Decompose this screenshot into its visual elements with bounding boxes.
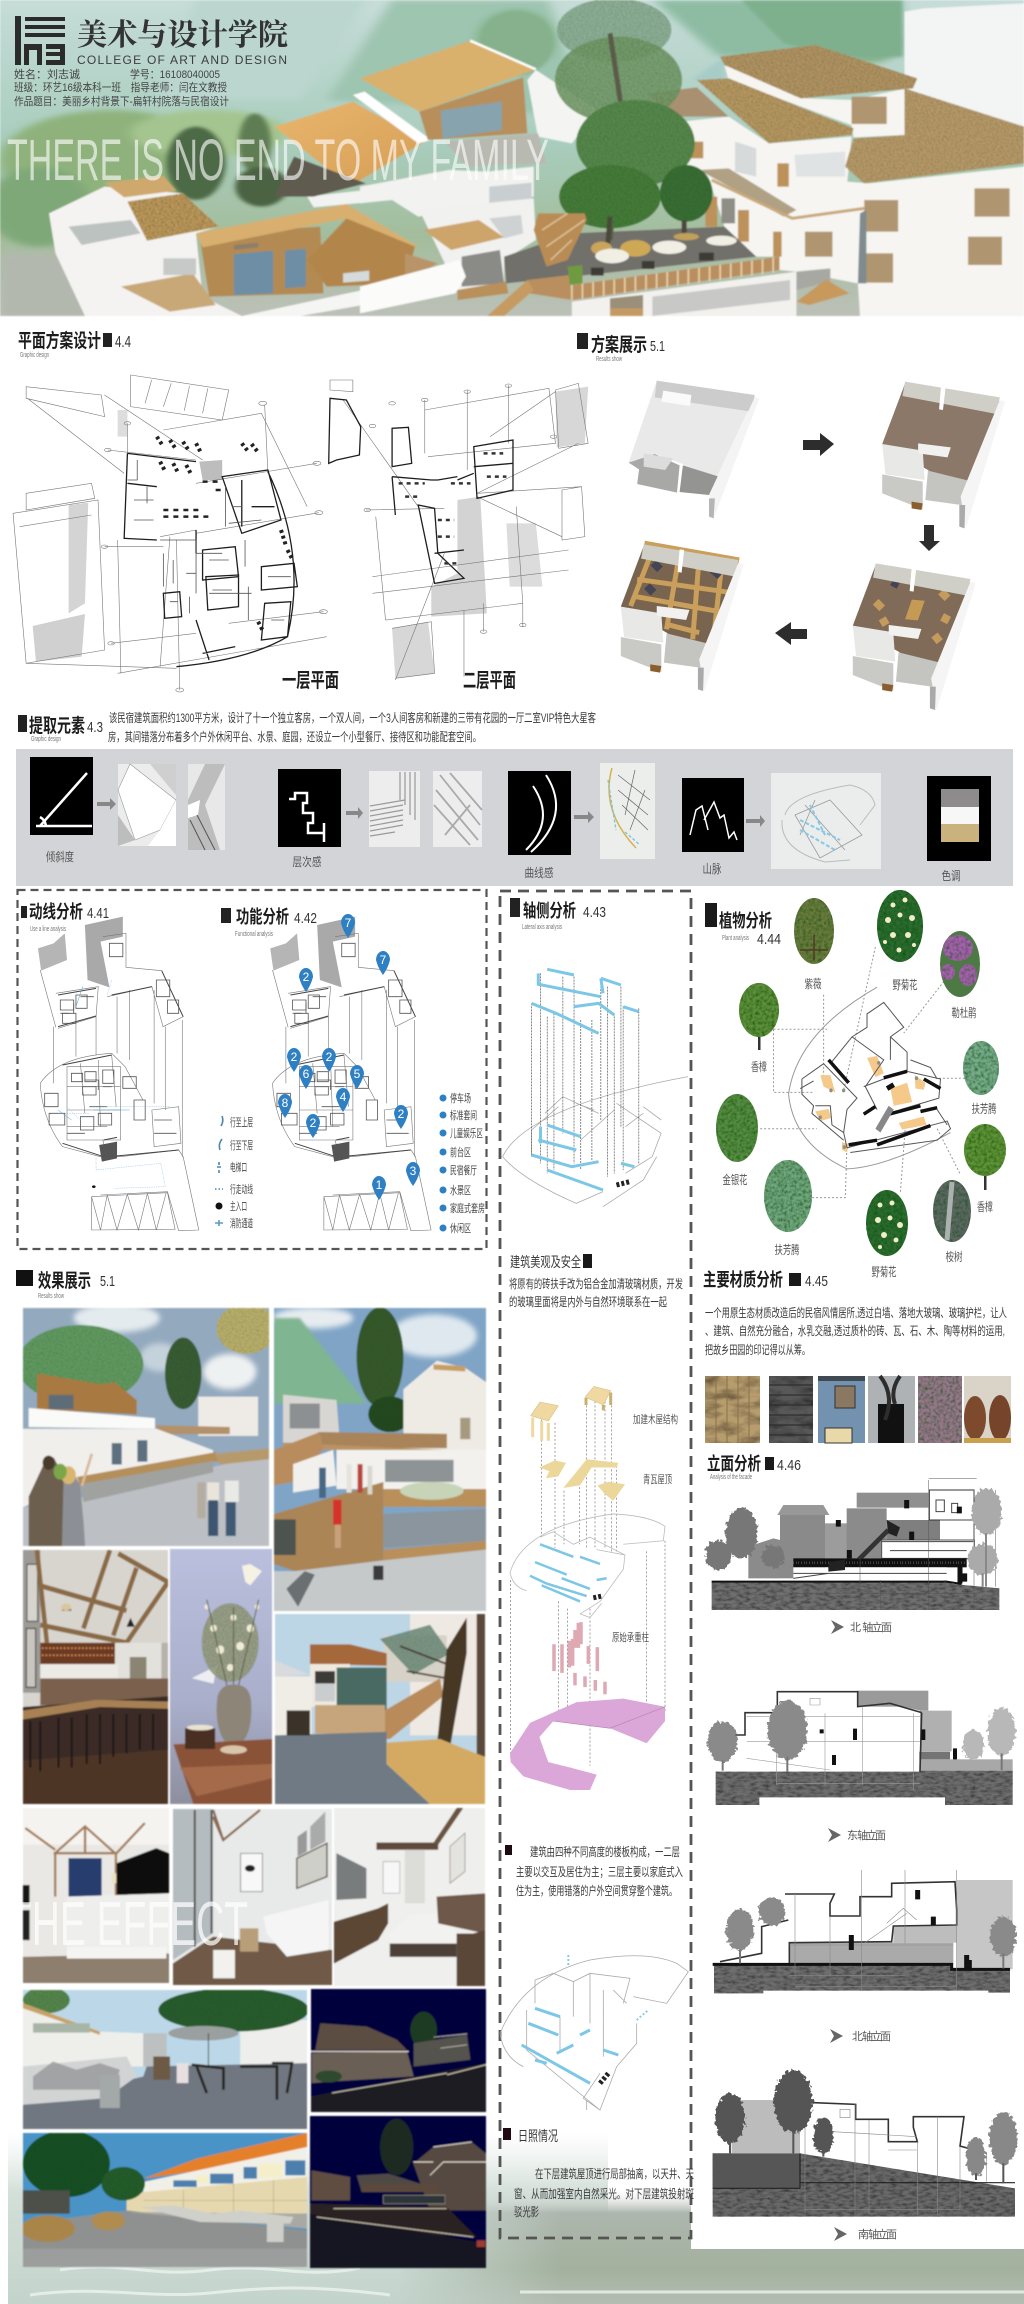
elevation label: north second [830, 2029, 891, 2043]
colour tone label: 色调 [942, 869, 960, 883]
circulation legend: 行走动线 [230, 1182, 253, 1196]
circulation legend: 消防通道 [230, 1216, 253, 1230]
stone strip and trim [699, 168, 796, 217]
text: sunlight: 在下层建筑屋顶进行局部抽离，以天井、天 [535, 2166, 694, 2181]
second floor plan [329, 380, 588, 680]
header right: hotel terraces [359, 0, 1024, 317]
floor levels text: 住为主，使用错落的户外空间贯穿整个建筑。 [516, 1883, 677, 1898]
tree [555, 0, 713, 243]
photo: bedroom with gable [23, 1808, 169, 1983]
floor labels [282, 670, 516, 692]
function legend: 家庭式套房 [450, 1201, 485, 1215]
function legend: 休闲区 [450, 1221, 471, 1235]
swatch: brick [918, 1376, 962, 1443]
curve arrow [574, 811, 594, 823]
photo: patio with umbrella [23, 1987, 309, 2129]
plant photo: wintercreeper right [963, 1041, 999, 1095]
function legend: 标准套间 [450, 1108, 477, 1122]
photo: night view one [311, 1989, 486, 2112]
function pins: 2 [398, 1107, 405, 1121]
wood cabin [199, 227, 323, 297]
swatch: blue wall [818, 1376, 865, 1443]
function legend: 前台区 [450, 1145, 471, 1159]
heading: effect display: 效果展示 [38, 1270, 91, 1292]
plant label: 扶芳腾 [972, 1101, 996, 1116]
heading: axonometric: 4.43 [583, 904, 606, 921]
wood roofs [845, 88, 1024, 183]
tree: camphor left [739, 983, 779, 1050]
timber stair [534, 213, 587, 267]
elevation label: north: 北 轴立面 [850, 1620, 892, 1634]
text: architecture and safety: 将原有的砖扶手改为铝合金加清玻璃材质，开发 [509, 1276, 683, 1291]
intro text: 该民宿建筑面积约1300平方米，设计了十一个独立客房，一个双人间，一个3人间客房和新建的三带有花园的一厅二室VIP特色大星客 [109, 710, 596, 725]
axonometric diagram 1 [502, 968, 688, 1207]
function pins: 2 [310, 1116, 317, 1130]
slope element [30, 757, 225, 850]
text: architecture and safety: 的玻璃里面将是内外与自然环境联系在一起 [509, 1294, 667, 1309]
tree: camphor right [964, 1124, 1006, 1190]
logo mark [15, 16, 65, 65]
elevation label: north second: 北 轴立面 [852, 2029, 891, 2043]
background trees [167, 113, 288, 207]
student info: 姓名：刘志诚 [14, 67, 80, 81]
mountain label: 山脉 [702, 861, 722, 876]
plant photo: bougainvillea [940, 931, 980, 997]
plant label: 紫薇 [804, 977, 822, 991]
heading: scheme display: Results show [596, 356, 623, 363]
heading: circulation: 4.41 [87, 905, 109, 922]
student info: 班级：环艺16级本科一班 指导老师：闫在文教授 [14, 80, 227, 94]
exploded axonometric diagram [510, 1386, 666, 1790]
white balcony bands [360, 167, 534, 213]
heading: circulation: 动线分析 [29, 902, 83, 922]
elevation label: east: 东 轴立面 [847, 1828, 886, 1842]
header hero image [0, 0, 1024, 317]
diagram labels: 原始承重柱 [612, 1630, 649, 1644]
text: materials [705, 1305, 1007, 1357]
slope arrow [97, 798, 116, 810]
heading: function: 4.42 [294, 910, 317, 927]
lower storey [572, 272, 796, 316]
panel: extract elements band [16, 749, 1013, 886]
text: sunlight: 驳光影 [514, 2205, 539, 2219]
heading: function: 功能分析 [236, 907, 289, 927]
heading: function: Functional analysis [235, 931, 273, 938]
circulation legend: 主入口 [230, 1200, 247, 1213]
heading: materials: 4.45 [805, 1273, 828, 1290]
heading: plant analysis: Plant analysis [722, 935, 749, 942]
curve label: 曲线感 [524, 865, 554, 880]
plant label: 勒杜鹃 [952, 1005, 976, 1020]
intro text [108, 710, 596, 744]
floor levels text: 建筑由四种不同高度的楼板构成，一二层 [530, 1844, 680, 1859]
slogan: the effect: THE EFFECT [8, 1890, 248, 1959]
panel: circulation and function analysis [18, 890, 486, 1249]
plant label: 扶芳腾 [774, 1242, 800, 1257]
function plan [270, 916, 432, 1231]
layering arrow [346, 807, 363, 819]
heading: scheme display: 方案展示 [591, 333, 647, 356]
axonometric diagram 3 [500, 1955, 689, 2110]
heading: extract elements [18, 715, 103, 743]
heading: elevation analysis: Analysis of the facade [710, 1474, 752, 1481]
function pins: 3 [410, 1164, 417, 1178]
wood windows [805, 97, 1010, 283]
heading: architecture and safety: 建筑美观及安全 [510, 1254, 581, 1270]
floor levels text: 主要以交互及居住为主；三层主要以家庭式入 [516, 1864, 683, 1879]
layering label: 层次感 [292, 854, 322, 869]
3D step 4: finished interior [621, 544, 744, 691]
heading: plant analysis: 植物分析 [719, 910, 772, 931]
heading: circulation: Use a line analysis [30, 926, 66, 933]
function pins: 2 [303, 970, 310, 984]
3D step 3: furniture [853, 563, 976, 710]
plant photo: honeysuckle [716, 1094, 758, 1162]
diagram labels: 青瓦屋顶 [643, 1473, 672, 1486]
function pins: 2 [326, 1050, 333, 1064]
railing [572, 257, 780, 300]
upper cabin roof and facade [419, 77, 527, 140]
upper white box [724, 65, 907, 137]
plant label: 香樟 [751, 1059, 767, 1074]
heading: circulation [21, 902, 109, 933]
mountain arrow [746, 815, 765, 827]
heading: plan design: 平面方案设计 [18, 329, 101, 352]
heading: plant analysis [705, 903, 781, 948]
function pins: 5 [354, 1067, 361, 1081]
heading: plan design [18, 329, 131, 359]
bottom landscape background [8, 2133, 1024, 2304]
plant label: 野菊花 [872, 1264, 896, 1279]
elevation label: east [828, 1828, 886, 1842]
3D step 1: empty shell [629, 381, 759, 518]
student info: 作品题目：美丽乡村背景下-扁轩村院落与民宿设计 [14, 94, 229, 108]
main white wall right [665, 117, 1024, 316]
heading: axonometric: 轴侧分析 [523, 901, 576, 921]
elevation label: south: 南 轴立面 [858, 2227, 897, 2241]
elevation label: south [834, 2227, 897, 2241]
heading: scheme display [577, 333, 665, 363]
heading: plan design: 4.4 [115, 334, 131, 351]
heading: elevation analysis [707, 1453, 801, 1481]
plant photo: crape myrtle [794, 898, 834, 964]
elevation label: north [831, 1620, 892, 1634]
elevation 2: east [706, 1690, 1017, 1805]
first floor plan [13, 375, 327, 692]
3D step 2: flooring [882, 382, 1005, 528]
heading: elevation analysis: 立面分析 [707, 1453, 761, 1474]
plant label: 金银花 [722, 1172, 748, 1187]
layering element [278, 769, 482, 847]
elevation 4: south [712, 2068, 1018, 2217]
circulation legend: 行至上层 [230, 1116, 253, 1129]
function pins: 7 [380, 953, 387, 967]
elevation 1: north [704, 1478, 1004, 1610]
plant label: 野菊花 [892, 977, 918, 992]
college title [77, 19, 288, 67]
heading: materials: 主要材质分析 [703, 1269, 783, 1290]
college title: COLLEGE OF ART AND DESIGN [77, 53, 287, 67]
plant label: 香樟 [977, 1199, 993, 1214]
text: sunlight [514, 2166, 694, 2219]
photo: day courtyard with orange roof [21, 2130, 307, 2267]
function legend [440, 1091, 485, 1235]
function pins [278, 914, 420, 1200]
text: architecture and safety [509, 1276, 683, 1309]
heading: plan design: Graphic design [20, 352, 49, 359]
wall behind cabin [527, 70, 597, 143]
photo: white bedroom [334, 1808, 485, 1986]
diagram labels [612, 1412, 678, 1644]
heading: scheme display: 5.1 [650, 338, 665, 355]
slogan overlay: THERE IS NO END TO MY FAMILY [7, 128, 549, 193]
text: sunlight: 窗、从而加强室内自然采光。对下层建筑投射斑 [514, 2186, 694, 2201]
function legend: 水景区 [450, 1184, 471, 1197]
circulation plan [38, 916, 200, 1231]
diagram labels: 加建木屋结构 [633, 1412, 678, 1426]
circulation legend: 行至下层 [230, 1139, 253, 1152]
plant photo: eucalyptus [933, 1180, 971, 1242]
photo: vase with flowers [170, 1549, 272, 1804]
plant photo: wild chrysanthemum bottom [866, 1190, 908, 1256]
function legend: 儿童娱乐区 [450, 1126, 483, 1140]
panel: axonometric column [500, 891, 694, 2238]
plant photo: wintercreeper left [764, 1160, 812, 1232]
floor levels text [505, 1844, 683, 1898]
photo: night view two [310, 2116, 486, 2268]
floor labels: 二层平面 [463, 670, 516, 692]
swatch: tree and glass [868, 1376, 915, 1443]
swatch: pottery [964, 1376, 1011, 1443]
function pins: 6 [303, 1067, 310, 1081]
terrace floor [504, 227, 756, 283]
mountain element [682, 773, 881, 869]
function pins: 2 [291, 1050, 298, 1064]
heading: function [221, 907, 317, 938]
photo: courtyard with tree [275, 1614, 485, 1804]
heading: elevation analysis: 4.46 [777, 1457, 801, 1474]
curve element [508, 763, 655, 859]
student info [14, 67, 229, 108]
left white wing [49, 187, 242, 316]
text: materials: 把故乡田园的印记得以从筹。 [705, 1342, 810, 1357]
umbrellas and seats [591, 233, 737, 272]
function pins: 4 [340, 1090, 347, 1104]
function pins: 7 [345, 916, 352, 930]
swatch: stone [769, 1376, 813, 1443]
floor plans [12, 374, 1005, 710]
function legend: 民宿餐厅 [450, 1163, 477, 1177]
function pins: 1 [376, 1178, 383, 1192]
heading: plant analysis: 4.44 [757, 931, 781, 948]
swatch: wood [705, 1376, 760, 1443]
plant site diagram [760, 947, 964, 1198]
heading: axonometric [510, 898, 606, 931]
heading: sunlight [503, 2128, 558, 2144]
arrows between 3D steps [775, 433, 940, 645]
heading: extract elements: 4.3 [87, 719, 103, 736]
plant label: 桉树 [946, 1249, 962, 1264]
student info: 学号：16108040005 [130, 67, 220, 81]
center white band [307, 176, 490, 217]
photo: living room [173, 1809, 332, 1985]
heading: axonometric: Lateral axis analysis [522, 924, 562, 931]
circulation legend: 电梯口 [230, 1161, 247, 1174]
function legend: 停车场 [450, 1091, 471, 1105]
heading: effect display: Results show [38, 1293, 65, 1300]
heading: extract elements: 提取元素 [29, 715, 85, 737]
heading: extract elements: Graphic design [31, 736, 61, 743]
circulation legend [215, 1116, 253, 1230]
heading: sunlight: 日照情况 [518, 2128, 558, 2144]
photo: terrace with woman in red [273, 1307, 486, 1611]
elevation 3: north [712, 1870, 1018, 1994]
plant photo: wild chrysanthemum [877, 890, 923, 962]
floor labels: 一层平面 [282, 670, 339, 692]
white tower [905, 3, 1024, 128]
material swatches [705, 1376, 1011, 1443]
intro text: 房，其间错落分布着多个户外休闲平台、水景、庭园，还设立一个小型餐厅、接待区和功能配套空间。 [108, 729, 481, 744]
photo: street view with couple [17, 1304, 276, 1546]
colour tone swatch [927, 776, 991, 861]
function pins: 8 [282, 1096, 289, 1110]
slope label: 倾斜度 [46, 849, 74, 864]
college title: 美术与设计学院 [77, 19, 288, 52]
heading: effect display [16, 1270, 115, 1300]
photo: cafe interior [23, 1550, 168, 1804]
heading: effect display: 5.1 [100, 1273, 115, 1290]
